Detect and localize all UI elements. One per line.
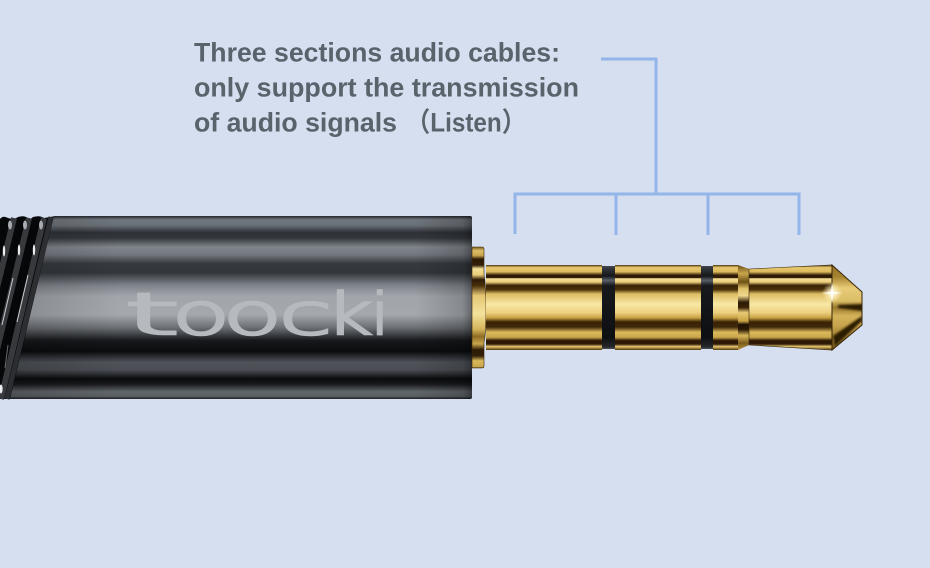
text block: description: of audio signals [194,108,397,138]
brand logo: o [223,282,282,348]
brand logo [124,282,389,348]
text block: description: （Listen） [406,108,526,138]
bracket connector lines [515,59,799,235]
braided cable [0,216,56,399]
sparkle highlight [821,282,843,304]
brand logo: i [371,282,389,348]
text block: description [194,38,579,138]
infographic canvas [0,42,862,400]
gold plug [472,247,863,368]
insulator ring two [701,266,713,349]
plug third sleeve [713,265,738,350]
plug second sleeve [615,265,701,350]
plug cone [832,265,863,350]
metal barrel housing [10,216,472,399]
brand logo: t [124,282,180,348]
brand logo: k [326,282,372,348]
brand logo: c [279,282,332,348]
brand logo: o [172,282,230,348]
plug collar [472,247,486,368]
insulator ring one [602,266,615,349]
plug taper [738,265,749,350]
text block: description: Three sections audio cables: [194,38,560,68]
plug first sleeve [486,265,602,350]
text block: description: only support the transmission [194,72,579,102]
plug tip [749,265,832,350]
